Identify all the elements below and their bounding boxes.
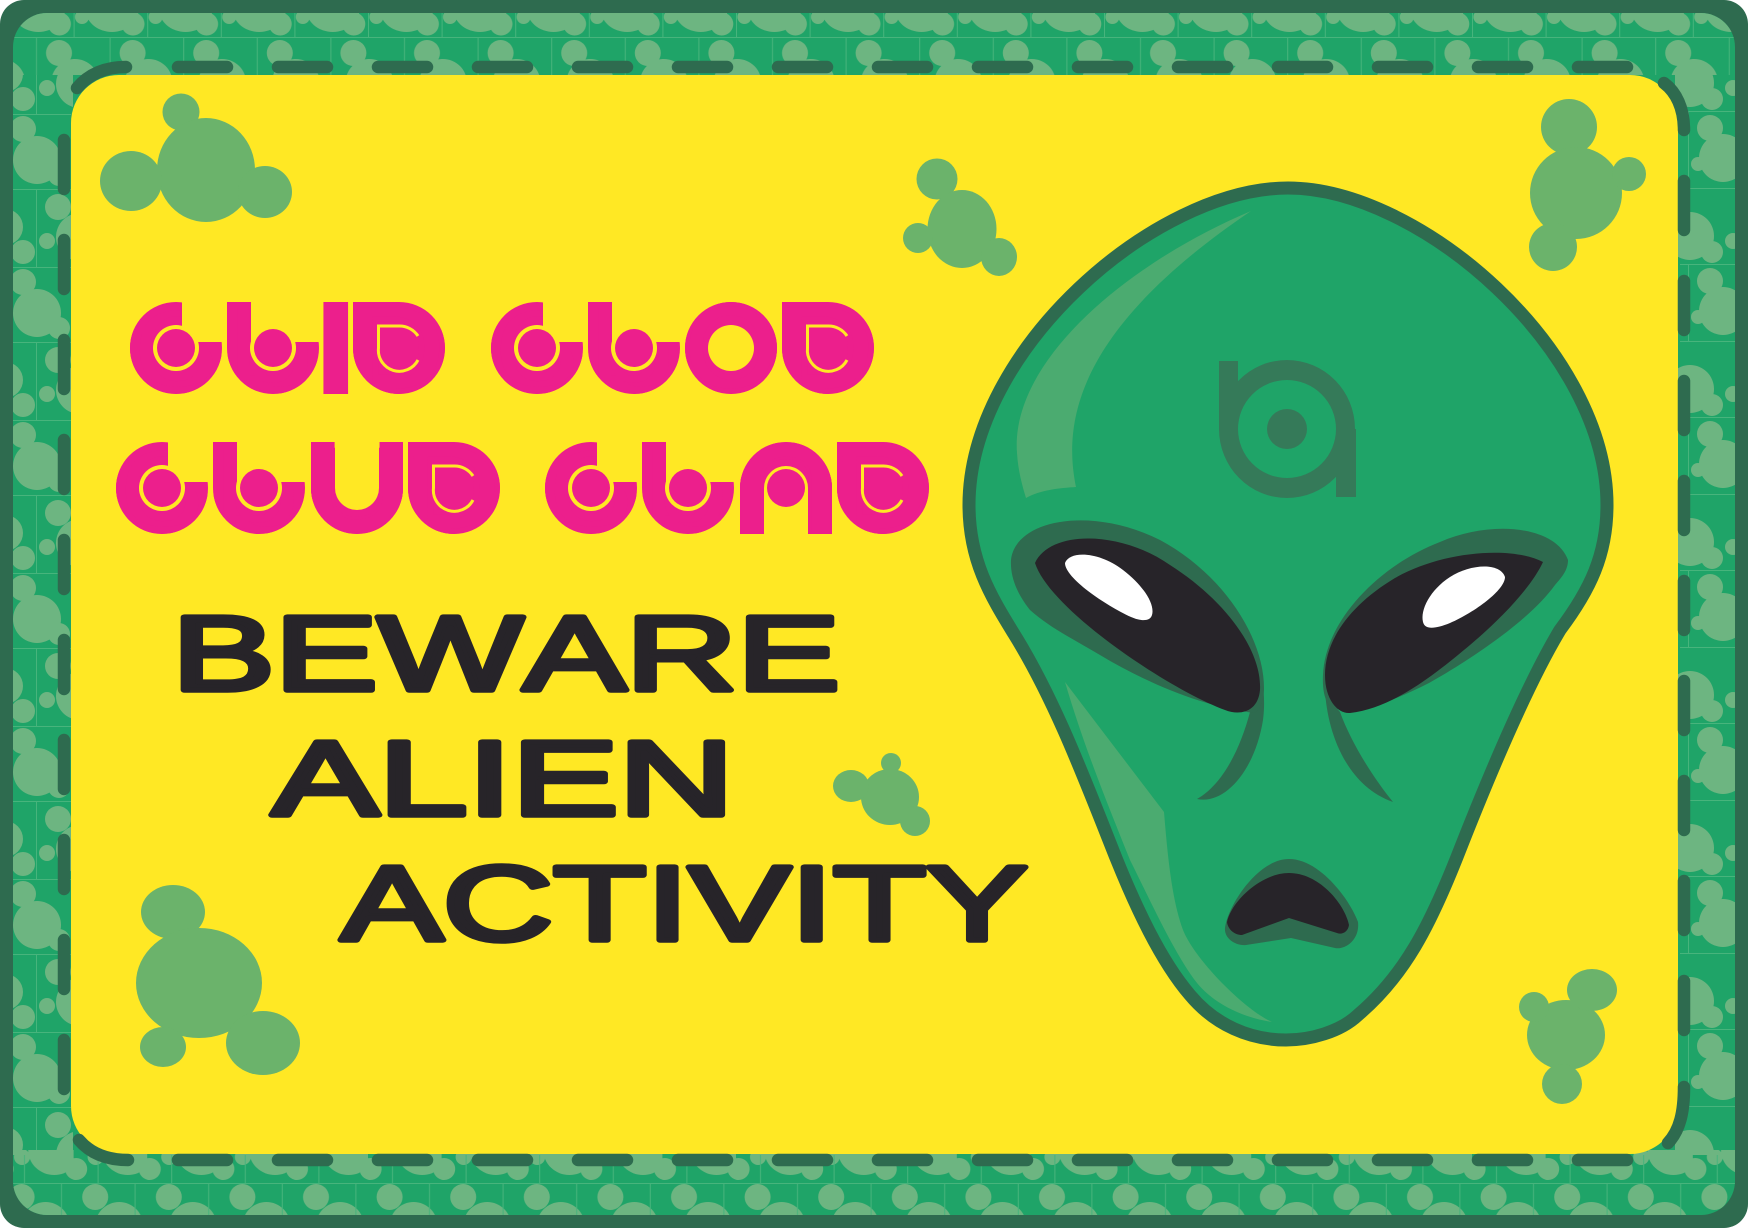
alien word 4: D	[830, 418, 932, 559]
alien word 2: b	[582, 284, 680, 414]
right cheek line	[1325, 690, 1393, 802]
right eye	[1323, 529, 1568, 713]
blob: top right	[1529, 99, 1646, 271]
alien word 3: b	[207, 424, 305, 554]
heading: alien: ALIEN	[272, 720, 734, 838]
alien word 2: 6	[489, 284, 585, 415]
left eye	[1011, 520, 1264, 713]
left cheek line	[1197, 680, 1264, 800]
blob: bottom right	[1519, 969, 1617, 1104]
alien head	[969, 188, 1607, 1040]
alien word 1: 6	[128, 284, 224, 415]
alien word 4: b	[636, 424, 734, 554]
alien word 4	[545, 442, 929, 534]
head shape	[969, 188, 1607, 1040]
alien word 3: 6	[114, 424, 210, 555]
forehead symbol	[1219, 360, 1356, 498]
alien word 3: U	[302, 415, 412, 558]
alien word 4: U	[731, 418, 841, 561]
blob: middle	[833, 753, 930, 836]
heading: activity: ACTIVITY	[341, 845, 1028, 963]
alien word 2: O	[682, 280, 781, 417]
blob: bottom left	[136, 885, 300, 1075]
alien word 2	[491, 302, 874, 394]
alien word 2: D	[775, 278, 877, 419]
alien word 4: 6	[543, 424, 639, 555]
alien word 1: b	[221, 284, 319, 414]
alien word 1: I	[312, 273, 360, 423]
blob: top centre	[903, 158, 1017, 276]
heading: alien script line 1	[130, 302, 874, 394]
heading: alien script line 2	[116, 442, 929, 534]
alien word 1: D	[346, 278, 448, 419]
alien word 3	[116, 442, 500, 534]
heading: beware: BEWARE	[172, 595, 840, 713]
alien word 1	[130, 302, 445, 394]
forehead highlight	[1017, 211, 1251, 498]
mouth	[1225, 859, 1358, 948]
alien word 3: D	[401, 418, 503, 559]
jaw highlight	[1065, 682, 1272, 1022]
blob: top left	[100, 94, 292, 222]
